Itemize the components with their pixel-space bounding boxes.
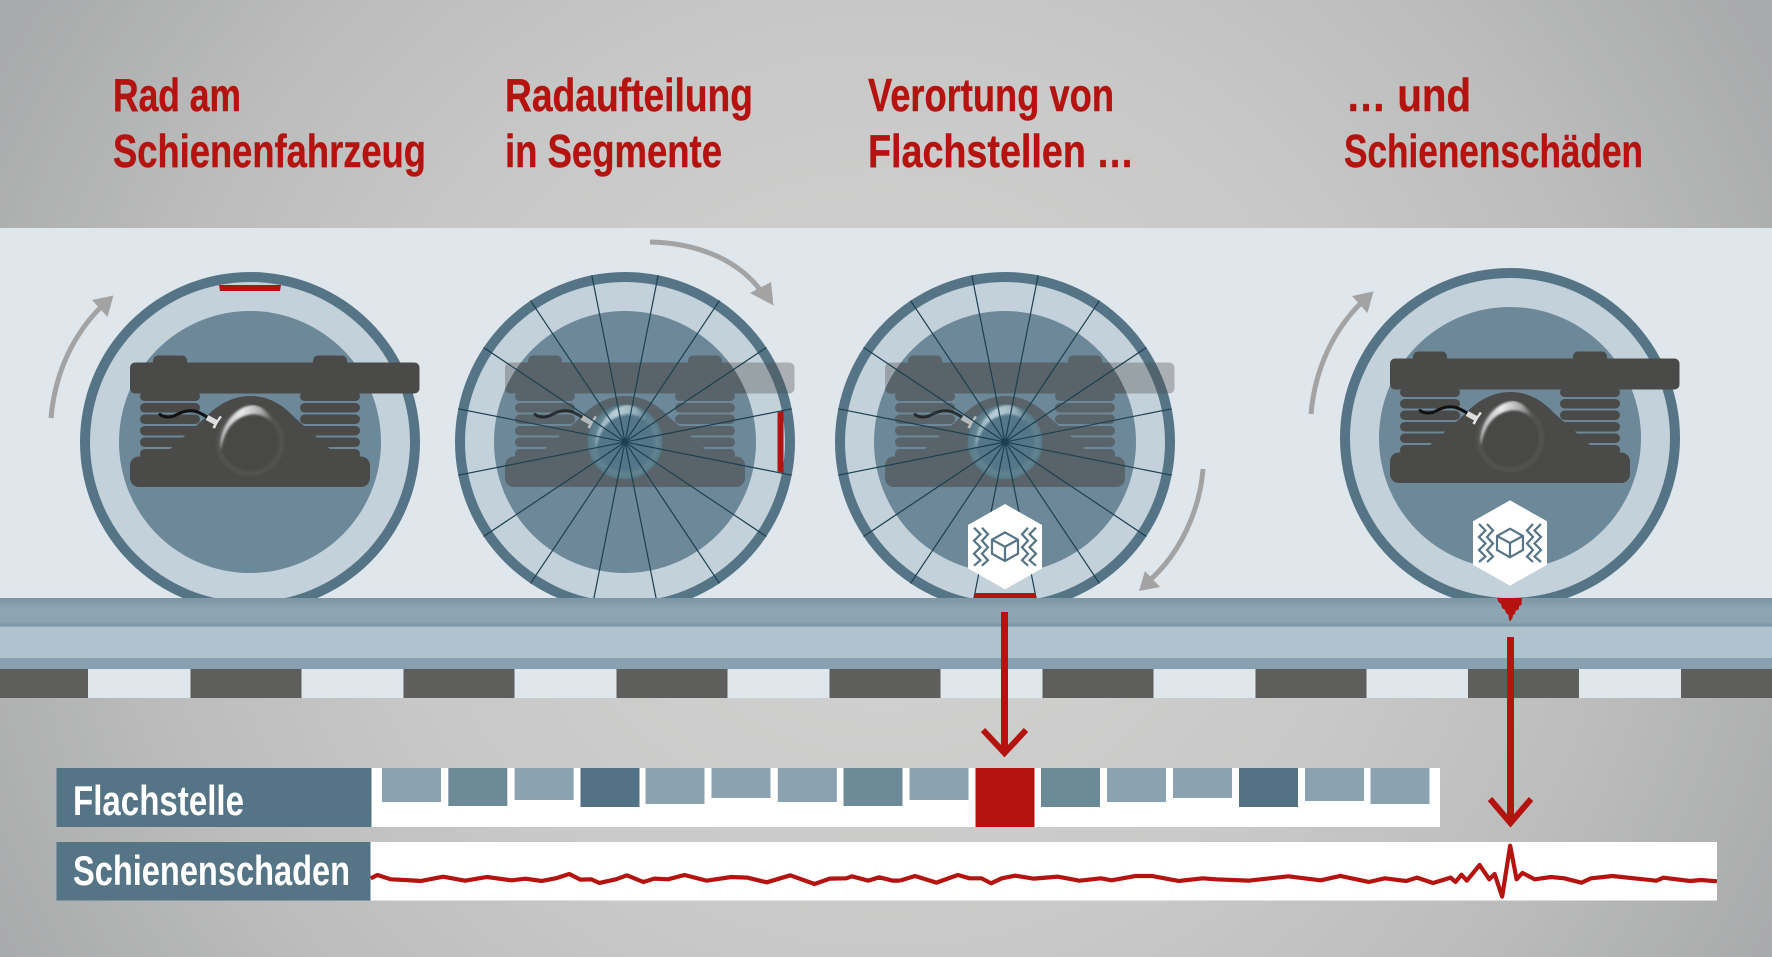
flat spot on right of wheel 2 [778, 411, 784, 473]
heading: Radaufteilung in Segmente [505, 69, 753, 177]
label: Schienenschaden [56, 842, 370, 900]
arrow: rotation wheel 3 [1139, 469, 1203, 591]
label: Flachstelle: Flachstelle [73, 777, 244, 824]
line trace [371, 846, 1717, 897]
wheel 1 with bogie [80, 272, 420, 612]
heading: Rad am Schienenfahrzeug: Rad am [113, 69, 241, 121]
arrow: rotation wheel 4 [1311, 292, 1374, 414]
sensor 2 [535, 411, 596, 428]
bogie 1 [130, 356, 420, 487]
arrow: rotation wheel 1 [51, 296, 114, 418]
wheel 3 with segments [835, 272, 1175, 612]
icon: vibration cube wheel 3 [968, 504, 1042, 589]
label: Flachstelle [56, 768, 372, 827]
icon: vibration cube wheel 4 [1473, 500, 1547, 586]
heading: Verortung von Flachstellen: Flachstellen … [868, 125, 1134, 177]
bogie 3 ghosted [885, 356, 1174, 487]
bogie 3 hub shading [885, 356, 1126, 487]
chart: Flachstelle [56, 768, 1440, 827]
heading: Radaufteilung in Segmente: Radaufteilung [505, 69, 753, 121]
flat spot on top of wheel 1 [219, 285, 281, 291]
bearing 2 [588, 404, 662, 480]
arrow: red to rail damage [1490, 637, 1531, 823]
arrow: red to flat spot bar [983, 612, 1026, 753]
sensor 4 [1420, 407, 1481, 424]
heading: Verortung von Flachstellen: Verortung von [868, 69, 1114, 121]
segments 3 [838, 275, 1172, 609]
bogie 4 [1390, 352, 1680, 483]
wheel 2 with segments [455, 272, 795, 612]
heading: Rad am Schienenfahrzeug: Schienenfahrzeug [113, 125, 426, 177]
segment bars [382, 768, 1430, 827]
sensor 1 [160, 411, 221, 428]
rail crack [1497, 598, 1522, 621]
heading: Rad am Schienenfahrzeug [113, 69, 426, 177]
panel: track band [0, 228, 1772, 698]
bearing 1 [212, 404, 288, 480]
bearing 3 [968, 404, 1042, 480]
sensor 3 [915, 411, 976, 428]
sleepers [0, 669, 1772, 698]
label: Schienenschaden: Schienenschaden [73, 847, 350, 894]
heading: und Schienenschäden: Schienenschäden [1344, 125, 1643, 177]
bearing 4 [1472, 400, 1548, 476]
heading: und Schienenschäden [1344, 69, 1643, 177]
flat spot at bottom of wheel 3 [974, 593, 1036, 598]
segments 2 [458, 275, 792, 609]
bogie 2 ghosted [505, 356, 794, 487]
rail [0, 598, 1772, 669]
bogie 2 hub shading [505, 356, 746, 487]
heading: Verortung von Flachstellen [868, 69, 1134, 177]
chart: Schienenschaden [56, 842, 1717, 900]
heading: und Schienenschäden: … und [1346, 69, 1471, 121]
arrow: rotation wheel 2 [650, 242, 774, 306]
wheel 4 with bogie [1340, 268, 1680, 608]
heading: Radaufteilung in Segmente: in Segmente [505, 125, 722, 177]
